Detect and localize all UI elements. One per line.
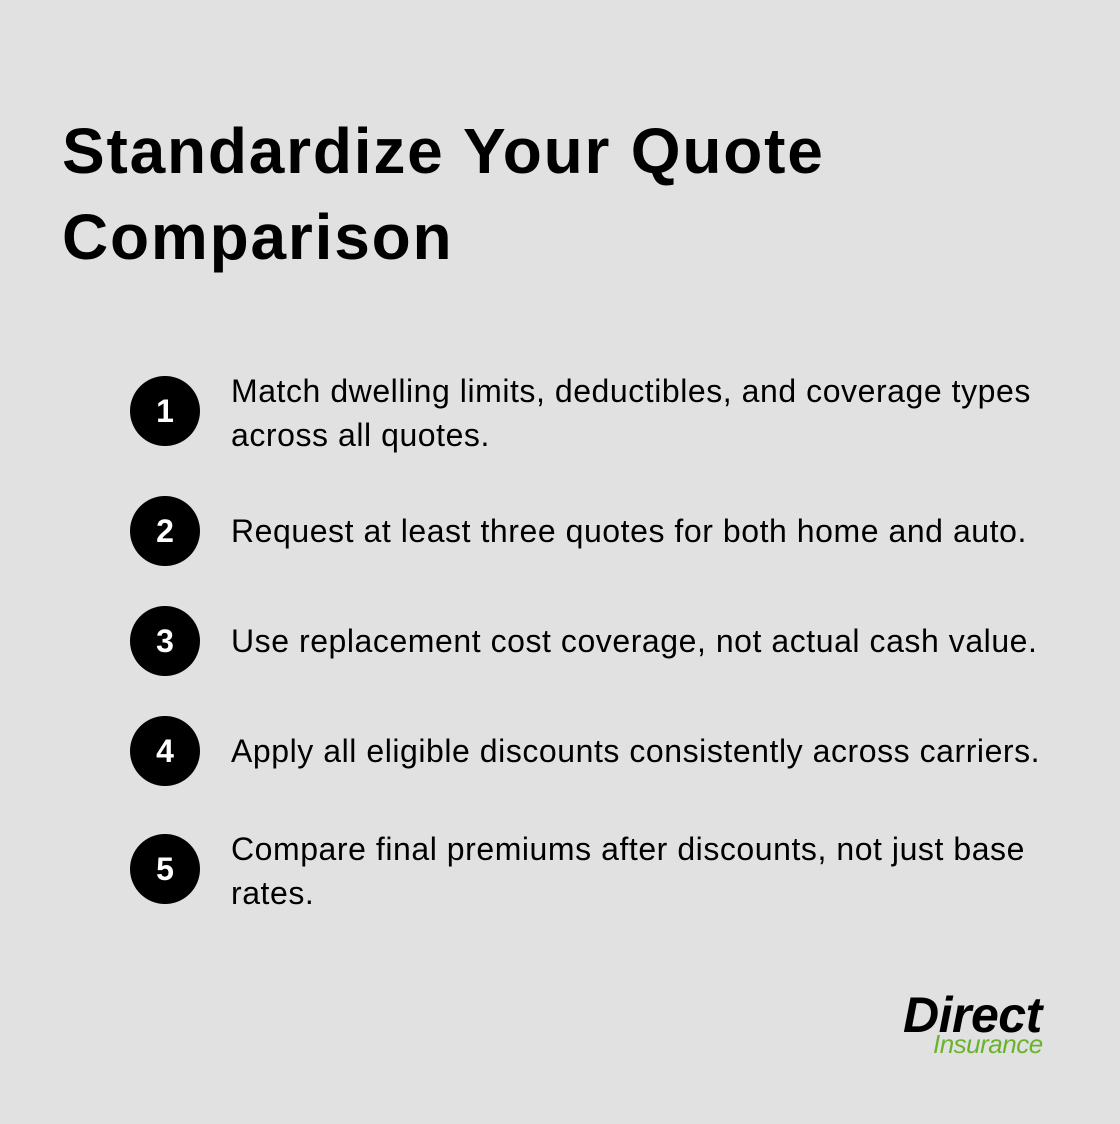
title: Comparison	[62, 201, 453, 273]
item 3: Use replacement cost coverage, not actual cash value.	[231, 623, 1037, 659]
item 5: Compare final premiums after discounts, not just base rates.	[231, 831, 1025, 911]
item 2: Request at least three quotes for both home and auto.	[231, 513, 1027, 549]
title	[62, 115, 825, 273]
item 5: 5	[156, 851, 174, 887]
item 4: 4	[156, 733, 174, 769]
item 2	[130, 496, 1027, 566]
item 1: 1	[156, 393, 174, 429]
item 1: Match dwelling limits, deductibles, and coverage types across all quotes.	[231, 373, 1031, 453]
item 3: 3	[156, 623, 174, 659]
item 4	[130, 716, 1040, 786]
title: Standardize Your Quote	[62, 115, 825, 187]
logo: Insurance	[933, 1029, 1043, 1059]
item 4: Apply all eligible discounts consistently across carriers.	[231, 733, 1040, 769]
item 2: 2	[156, 513, 174, 549]
item 3	[130, 606, 1037, 676]
logo: Direct	[903, 987, 1042, 1043]
